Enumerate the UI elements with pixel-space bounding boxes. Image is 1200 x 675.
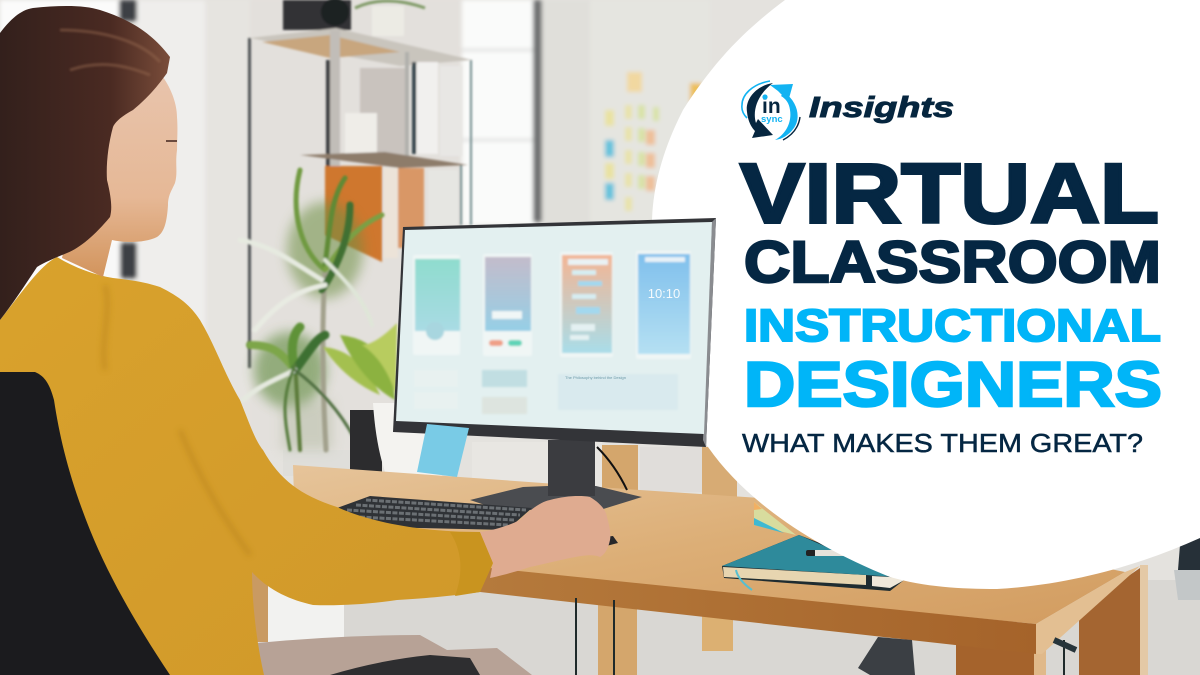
white circle panel: [652, 0, 1200, 589]
desk: [250, 442, 1148, 675]
hair: [0, 6, 170, 320]
neck and face: [62, 77, 177, 277]
notebook and pen: [722, 535, 908, 591]
logo: in sync Insights: [742, 81, 954, 140]
CLASSROOM: CLASSROOM: [744, 230, 1161, 295]
Insights wordmark: Insights: [809, 92, 954, 124]
sticky note: [417, 424, 469, 477]
sweater cuff: [450, 532, 493, 596]
DESIGNERS: DESIGNERS: [744, 350, 1162, 420]
potted plants: [240, 170, 443, 480]
desk legs: [250, 560, 1148, 675]
clock on phone screen: 10:10: [648, 286, 680, 301]
office chair: [0, 372, 170, 675]
woman at desk: [0, 6, 610, 675]
shelving unit: [248, 0, 472, 368]
logo icon: sync: [761, 114, 783, 125]
subtitle: WHAT MAKES THEM GREAT?: [742, 430, 1143, 458]
desk items: cables and chair caster: [576, 535, 1200, 675]
hand: [480, 496, 610, 578]
colored paper pad: [754, 502, 796, 535]
eye: [166, 140, 177, 142]
title: Virtual Classroom: [740, 146, 1161, 295]
INSTRUCTIONAL: INSTRUCTIONAL: [744, 300, 1161, 351]
logo icon: in: [762, 95, 781, 118]
yellow sweater: [0, 257, 493, 675]
monitor stand: [470, 440, 642, 510]
monitor screen: [396, 222, 712, 434]
floor: [340, 580, 1200, 675]
VIRTUAL: VIRTUAL: [740, 146, 1159, 240]
title: Instructional Designers: [744, 300, 1162, 420]
screen caption: The Philosophy behind the Design: [565, 375, 626, 380]
desk plant dark backdrop: [350, 410, 382, 472]
logo icon: [742, 81, 800, 140]
seat and pants: [257, 635, 532, 675]
armrest: [330, 655, 480, 675]
keyboard and mouse: [337, 496, 618, 557]
desktop monitor: [393, 218, 716, 510]
